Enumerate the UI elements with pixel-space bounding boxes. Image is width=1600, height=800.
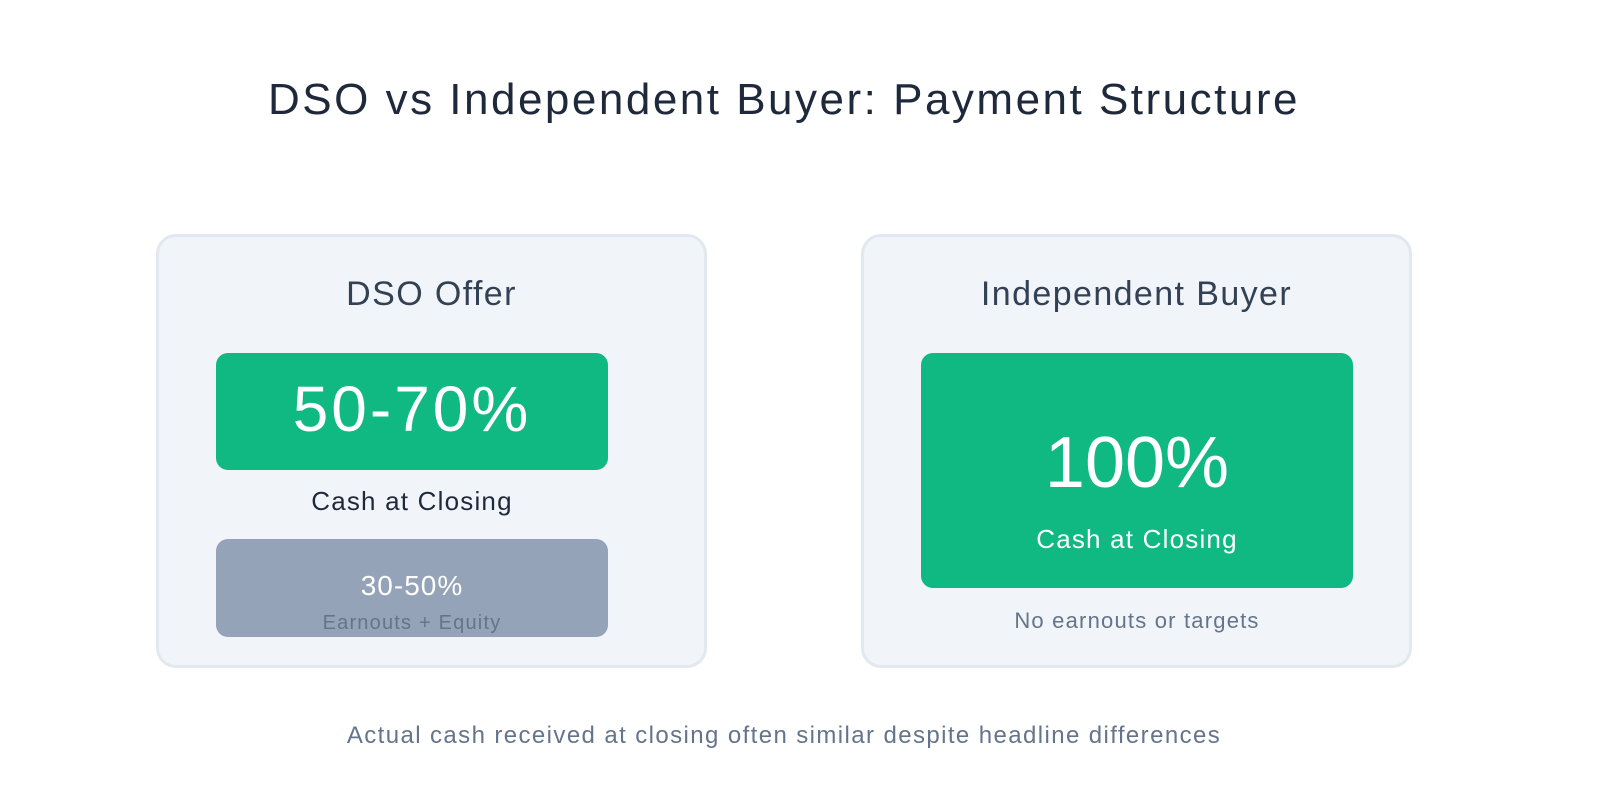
box: 30-50% earnouts	[216, 539, 608, 637]
label: Cash at Closing: Cash at Closing	[1036, 524, 1238, 554]
label: Cash at Closing: Cash at Closing	[311, 486, 513, 516]
stat: 50-70%: 50-70%	[293, 373, 531, 445]
heading: DSO Offer: DSO Offer	[346, 275, 517, 313]
footer note: Actual cash received at closing often similar despite headline differences	[347, 722, 1221, 749]
panel: DSO offer	[156, 234, 707, 668]
label: Earnouts + Equity: Earnouts + Equity	[323, 612, 501, 634]
panel: Independent Buyer	[861, 234, 1412, 668]
title: DSO vs Independent Buyer: Payment Structure	[268, 75, 1300, 124]
box: 100% cash	[921, 353, 1353, 588]
stat: 30-50%: 30-50%	[361, 570, 463, 601]
box: 50-70% cash	[216, 353, 608, 470]
note: No earnouts: No earnouts or targets	[1014, 608, 1260, 633]
heading: Independent Buyer: Independent Buyer	[981, 275, 1292, 313]
stat: 100%: 100%	[1045, 423, 1229, 503]
